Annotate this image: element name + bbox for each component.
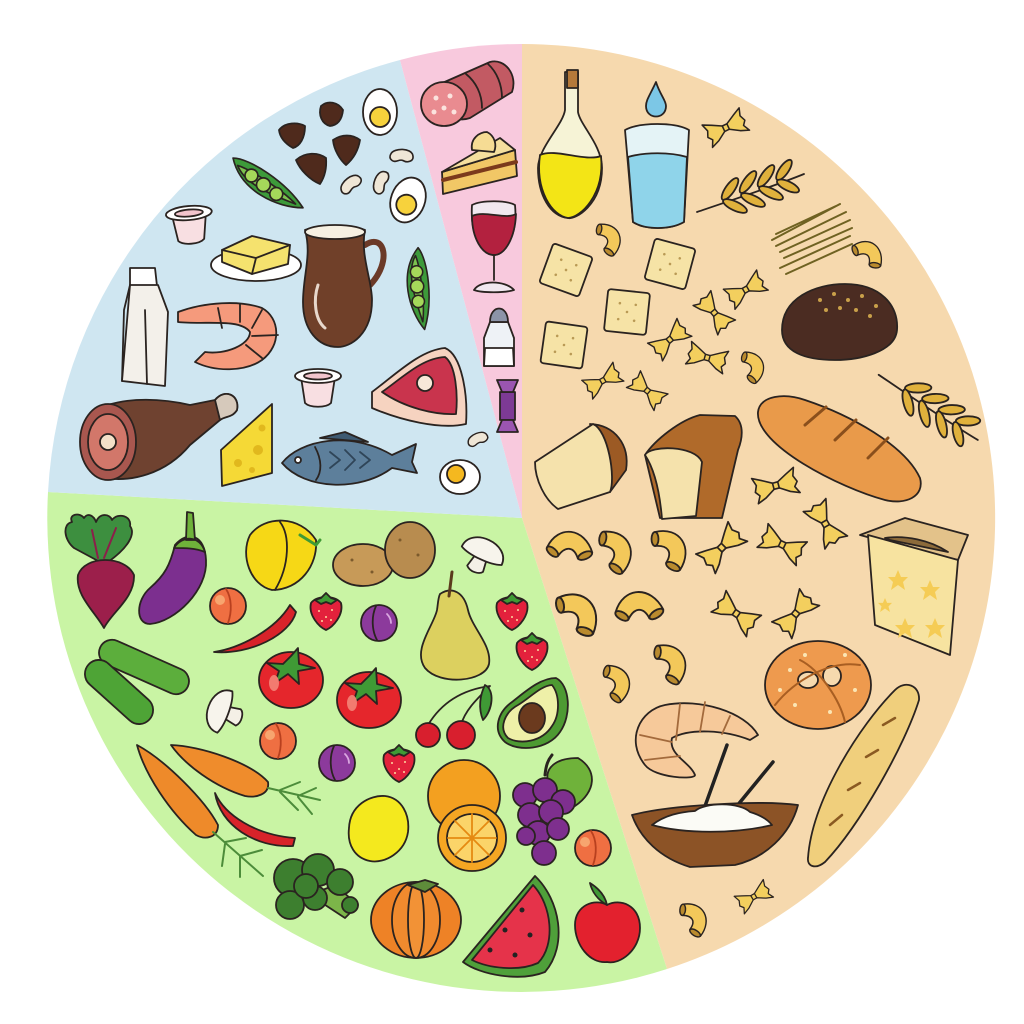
icon: bread slice: [535, 424, 627, 509]
icon: macaroni: [555, 591, 600, 643]
icon: bow pasta: [648, 318, 692, 361]
icon: cheese wedge: [221, 404, 272, 486]
icon: bow pasta: [757, 524, 807, 566]
icon: red chili: [215, 793, 295, 846]
icon: macaroni: [592, 223, 623, 259]
icon: lemon: [349, 796, 408, 861]
icon: bow pasta: [772, 589, 820, 639]
icon: apple: [575, 883, 640, 962]
icon: cereal box: [860, 518, 968, 655]
icon: beans: [338, 149, 413, 196]
icon: strawberry: [310, 593, 342, 630]
icon: pear: [421, 572, 489, 680]
icon: cracker: [540, 321, 588, 369]
icon: beetroot: [65, 515, 134, 628]
icon: clay milk jug: [303, 225, 384, 347]
icon: orange: [428, 760, 500, 832]
icon: potatoes: [333, 522, 435, 586]
icon: bow pasta: [711, 591, 761, 637]
icon: fried egg: [440, 460, 480, 494]
icon: yogurt cup: [295, 369, 341, 407]
icon: bow pasta: [626, 371, 668, 411]
icon: butter on plate: [211, 236, 301, 281]
icon: yogurt cup: [165, 204, 214, 246]
icon: salt shaker: [484, 308, 514, 366]
icon: wheat ear: [697, 158, 804, 216]
icon: water glass and drop: [625, 82, 689, 228]
icon: bow pasta: [582, 362, 624, 399]
sector: grains: [522, 44, 995, 969]
icon: bread loaf: [645, 415, 742, 519]
icon: cherries: [416, 685, 492, 749]
icon: macaroni: [544, 523, 598, 576]
icon: peach: [210, 588, 246, 624]
icon: cracker: [604, 289, 650, 335]
icon: oil bottle: [538, 70, 602, 218]
icon: tomato: [337, 668, 401, 728]
icon: macaroni: [652, 531, 686, 573]
icon: broccoli: [274, 854, 358, 919]
icon: eggplant: [139, 512, 206, 624]
sector: protein and dairy: [48, 60, 522, 518]
icon: cake slice: [442, 132, 517, 194]
icon: strawberry: [516, 633, 548, 670]
icon: long loaf: [758, 396, 921, 501]
icon: bean: [466, 430, 489, 448]
icon: wine glass: [472, 201, 516, 292]
icon: macaroni: [596, 664, 634, 706]
icon: carrot with greens: [137, 745, 263, 877]
icon: watermelon slice: [463, 876, 559, 977]
icon: bow pasta: [723, 270, 768, 309]
icon: cucumber: [95, 636, 193, 698]
icon: plum: [319, 745, 355, 781]
icon: chocolate pieces: [279, 103, 360, 184]
icon: ham leg: [80, 394, 237, 480]
icon: croissant: [636, 702, 758, 778]
icon: cucumber: [79, 654, 159, 730]
sector: sweets and treats: [400, 44, 522, 518]
icon: peach: [575, 830, 611, 866]
icon: strawberry: [496, 593, 528, 630]
icon: pumpkin: [371, 880, 461, 958]
icon: shrimp: [178, 303, 278, 369]
icon: avocado: [498, 678, 568, 748]
icon: milk carton: [122, 268, 168, 386]
icon: bow pasta: [693, 291, 736, 335]
protein and dairy group: [80, 89, 489, 494]
icon: rice bowl with chopsticks: [632, 745, 798, 867]
icon: macaroni: [678, 903, 708, 939]
icon: steak: [372, 348, 466, 426]
icon: peach: [260, 723, 296, 759]
icon: mushroom: [201, 685, 249, 739]
icon: pea pod: [233, 158, 303, 208]
icon: red chili: [214, 605, 296, 652]
icon: plum: [361, 605, 397, 641]
icon: bagel pretzel: [765, 641, 871, 729]
icon: orange half: [438, 805, 506, 871]
icon: salami: [421, 61, 513, 126]
icon: macaroni: [593, 530, 634, 577]
icon: macaroni: [613, 584, 669, 637]
icon: fish: [282, 432, 417, 485]
icon: bow pasta: [803, 499, 847, 549]
icon: bow pasta: [752, 467, 800, 504]
icon: bow pasta: [734, 880, 773, 914]
icon: tomato: [259, 648, 323, 708]
icon: yellow bell pepper: [246, 521, 320, 590]
icon: bow pasta: [702, 108, 750, 147]
icon: bow pasta: [686, 341, 729, 374]
icon: cracker: [644, 238, 696, 290]
icon: cracker: [539, 243, 593, 297]
grains group: [535, 70, 991, 939]
fruit and vegetables group: [65, 512, 640, 977]
icon: dark bread roll: [782, 284, 897, 360]
sector: fruit and vegetables: [47, 492, 667, 992]
treats group: [421, 61, 518, 432]
icon: wrapped candy: [497, 380, 518, 432]
icon: grapes: [513, 755, 592, 865]
icon: bow pasta: [696, 522, 748, 574]
icon: carrot with greens: [171, 745, 320, 814]
icon: macaroni: [651, 644, 687, 687]
icon: pea pod: [382, 248, 461, 329]
icon: boiled egg: [384, 173, 432, 227]
icon: spaghetti bundle: [772, 204, 852, 274]
icon: boiled egg: [363, 89, 397, 135]
icon: wheat ear: [876, 341, 991, 466]
icon: macaroni: [735, 351, 767, 386]
icon: strawberry: [383, 745, 415, 782]
icon: macaroni: [851, 237, 885, 275]
icon: thin baguette: [808, 685, 919, 866]
icon: mushroom: [454, 531, 509, 581]
